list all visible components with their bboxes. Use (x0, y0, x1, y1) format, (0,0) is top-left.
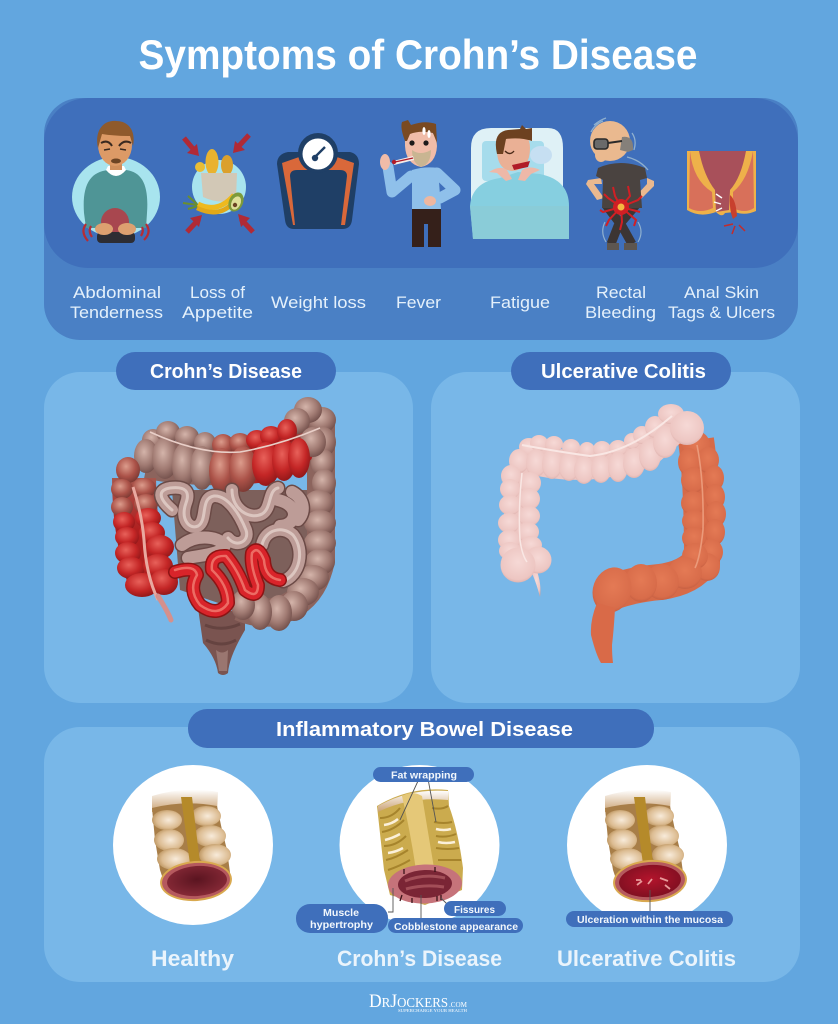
illustration: ulcerative colitis colon (498, 404, 726, 663)
caption: healthy: Healthy (151, 946, 235, 971)
label: abdominal tenderness: Tenderness (70, 303, 163, 322)
label: anal skin tags and ulcers: Anal Skin (684, 283, 759, 302)
icon: weight scale (277, 133, 359, 229)
callout: fat wrapping: Fat wrapping (391, 770, 457, 782)
label: weight loss: Weight loss (271, 293, 366, 312)
label: abdominal tenderness: Abdominal (73, 283, 161, 302)
label: rectal bleeding: Bleeding (585, 303, 656, 322)
heading: Crohn's disease (116, 352, 336, 390)
callout: cobblestone appearance: Cobblestone appearance (394, 921, 518, 933)
caption: ulcerative colitis: Ulcerative Colitis (557, 946, 736, 971)
label: anal skin tags and ulcers: Tags & Ulcers (668, 303, 775, 322)
callout: muscle hypertrophy (296, 904, 388, 933)
callout: fissures (444, 901, 506, 916)
logo: DrJockers: .COM (449, 1001, 468, 1009)
panel: ulcerative colitis (431, 372, 800, 703)
label: rectal bleeding: Rectal (596, 283, 646, 302)
diagram: ulcerative colitis colon (567, 765, 727, 925)
callout: ulceration within the mucosa: Ulceration within the mucosa (577, 914, 723, 926)
heading: ulcerative colitis: Ulcerative Colitis (541, 361, 706, 383)
heading: Crohn's disease: Crohn’s Disease (150, 361, 302, 383)
panel: symptoms (44, 98, 798, 340)
panel: Crohn's disease (44, 372, 413, 703)
logo: DrJockers: DRJOCKERS (369, 991, 448, 1012)
icon: abdominal tenderness (72, 121, 160, 243)
title: Symptoms of Crohn’s Disease (138, 31, 698, 78)
callout: muscle hypertrophy: hypertrophy (310, 919, 373, 931)
icon: fatigue (470, 125, 569, 239)
caption: Crohn's disease: Crohn’s Disease (337, 946, 502, 971)
label: fatigue: Fatigue (490, 293, 550, 312)
diagram: Crohn's colon (340, 765, 500, 925)
logo: DrJockers: SUPERCHARGE YOUR HEALTH (398, 1008, 468, 1013)
heading: inflammatory bowel disease: Inflammatory Bowel Disease (276, 719, 573, 741)
icon: loss of appetite (183, 135, 253, 232)
diagram: healthy colon (113, 765, 273, 925)
callout: fissures: Fissures (454, 904, 495, 916)
icon: fever (380, 120, 455, 247)
icon: rectal bleeding (586, 118, 654, 250)
label: loss of appetite: Loss of (190, 283, 245, 302)
label: fever: Fever (396, 293, 441, 312)
icon: anal skin tags and ulcers (687, 151, 756, 234)
panel: inflammatory bowel disease (44, 727, 800, 982)
callout: muscle hypertrophy: Muscle (323, 907, 359, 919)
heading: inflammatory bowel disease (188, 709, 654, 748)
heading: ulcerative colitis (511, 352, 731, 390)
illustration: Crohn's intestines (111, 397, 336, 675)
callout: ulceration within the mucosa (566, 911, 733, 927)
callout: fat wrapping (373, 767, 474, 782)
label: loss of appetite: Appetite (182, 303, 253, 322)
